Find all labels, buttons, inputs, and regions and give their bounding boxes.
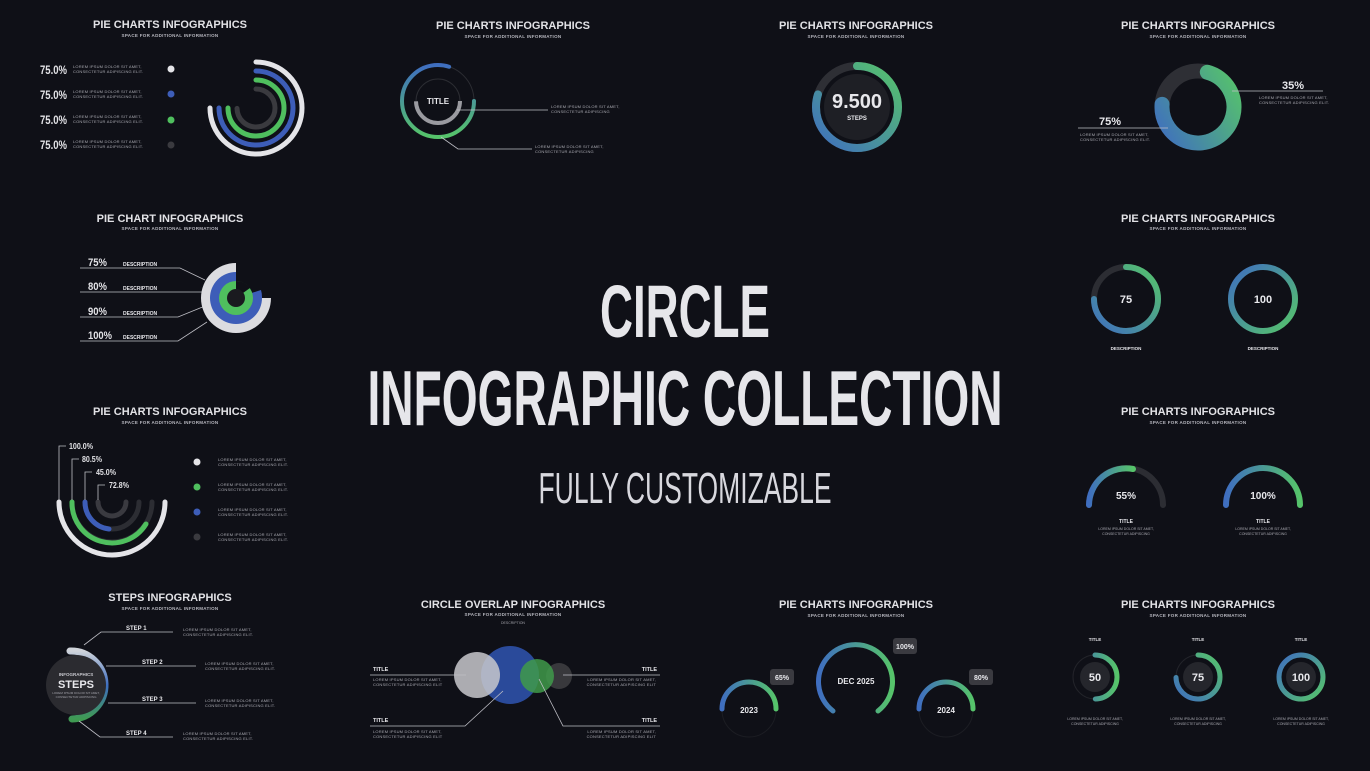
gauge 100%: LOREM IPSUM DOLOR SIT AMET,: [1235, 527, 1291, 531]
gauge 100%: [1226, 468, 1300, 536]
rows: DESCRIPTION: [123, 311, 158, 317]
callouts: CONSECTETUR ADIPISCING ELIT.: [1259, 100, 1329, 105]
heading: [93, 19, 247, 38]
callouts: TITLE: [373, 718, 389, 724]
heading: PIE CHARTS INFOGRAPHICS: [93, 406, 247, 418]
callouts: CONSECTETUR ADIPISCING: [551, 109, 610, 114]
legend rows: [40, 63, 174, 152]
callouts: LOREM IPSUM DOLOR SIT AMET,: [1259, 95, 1328, 100]
step labels: LOREM IPSUM DOLOR SIT AMET,: [183, 731, 252, 736]
value labels: 100.0%: [69, 442, 93, 451]
chart: steps ring: 9.500: [832, 91, 882, 113]
callouts: LOREM IPSUM DOLOR SIT AMET,: [587, 677, 656, 682]
subtitle: FULLY CUSTOMIZABLE: [538, 464, 832, 513]
ring 100: LOREM IPSUM DOLOR SIT AMET,: [1273, 717, 1329, 721]
gauge 55%: 55%: [1116, 491, 1136, 502]
ring 75: CONSECTETUR ADIPISCING: [1174, 722, 1222, 726]
heading: PIE CHART INFOGRAPHICS: [97, 213, 243, 225]
ring 75: TITLE: [1192, 637, 1204, 642]
callouts: TITLE: [373, 667, 389, 673]
chart: steps circle: STEPS: [58, 679, 94, 691]
legend rows: 75.0%: [40, 138, 67, 152]
legend rows: LOREM IPSUM DOLOR SIT AMET,: [73, 89, 142, 94]
ring 100: TITLE: [1295, 637, 1307, 642]
heading: PIE CHARTS INFOGRAPHICS: [1121, 20, 1275, 32]
badge 100%: [893, 638, 917, 654]
legend rows: CONSECTETUR ADIPISCING ELIT.: [73, 119, 143, 124]
legend rows: 75.0%: [40, 63, 67, 77]
heading: PIE CHARTS INFOGRAPHICS: [436, 20, 590, 32]
gauge 55%: TITLE: [1119, 519, 1134, 525]
chart: donut: [1154, 63, 1242, 151]
rows: 100%: [88, 330, 112, 342]
badge 65%: [770, 669, 794, 685]
step labels: LOREM IPSUM DOLOR SIT AMET,: [205, 661, 274, 666]
heading: [1121, 406, 1275, 425]
callouts: LOREM IPSUM DOLOR SIT AMET,: [373, 677, 442, 682]
ring 75: 75: [1120, 294, 1132, 306]
gauge 55%: CONSECTETUR ADIPISCING: [1102, 532, 1150, 536]
legend: LOREM IPSUM DOLOR SIT AMET,: [218, 532, 287, 537]
gauge 55%: LOREM IPSUM DOLOR SIT AMET,: [1098, 527, 1154, 531]
chart: steps ring: [816, 66, 898, 148]
step labels: LOREM IPSUM DOLOR SIT AMET,: [205, 698, 274, 703]
panel: title ring: [402, 20, 620, 154]
heading: SPACE FOR ADDITIONAL INFORMATION: [1150, 34, 1246, 39]
callouts: [441, 104, 620, 154]
panel: steps infographics: [46, 592, 275, 741]
callouts: 35%: [1282, 80, 1304, 92]
heading: [421, 599, 605, 625]
value labels: 72.8%: [109, 481, 129, 490]
gauge 2023: [722, 682, 776, 737]
chart: layered pie: [201, 263, 271, 333]
step labels: CONSECTETUR ADIPISCING ELIT.: [205, 666, 275, 671]
legend: LOREM IPSUM DOLOR SIT AMET,: [218, 457, 287, 462]
chart: ring: TITLE: [427, 97, 450, 106]
step labels: CONSECTETUR ADIPISCING ELIT.: [205, 703, 275, 708]
gauge 2024: [919, 682, 973, 737]
heading: SPACE FOR ADDITIONAL INFORMATION: [122, 420, 218, 425]
heading: SPACE FOR ADDITIONAL INFORMATION: [1150, 226, 1246, 231]
heading: PIE CHARTS INFOGRAPHICS: [1121, 599, 1275, 611]
legend rows: CONSECTETUR ADIPISCING ELIT.: [73, 144, 143, 149]
heading: [93, 406, 247, 425]
heading: PIE CHARTS INFOGRAPHICS: [779, 20, 933, 32]
heading: [779, 599, 933, 618]
heading: [436, 20, 590, 39]
badge 80%: [969, 669, 993, 685]
heading: CIRCLE OVERLAP INFOGRAPHICS: [421, 599, 605, 611]
chart: steps ring: STEPS: [847, 116, 867, 122]
badge 65%: 65%: [775, 675, 790, 682]
callouts: [1078, 80, 1329, 142]
panel: circle overlap: [370, 599, 660, 739]
legend: CONSECTETUR ADIPISCING ELIT.: [218, 462, 288, 467]
heading: PIE CHARTS INFOGRAPHICS: [779, 599, 933, 611]
panel: two rings 75/100: [1094, 213, 1295, 351]
ring 50: 50: [1089, 672, 1101, 684]
callouts: CONSECTETUR ADIPISCING ELIT: [373, 682, 443, 687]
step labels: STEP 1: [126, 626, 147, 632]
gauge 2024: 2024: [937, 706, 955, 715]
rows: DESCRIPTION: [123, 262, 158, 268]
heading: SPACE FOR ADDITIONAL INFORMATION: [808, 613, 904, 618]
legend rows: CONSECTETUR ADIPISCING ELIT.: [73, 94, 143, 99]
rows: DESCRIPTION: [123, 286, 158, 292]
panel: three rings 50/75/100: [1067, 599, 1329, 726]
gauge 100%: TITLE: [1256, 519, 1271, 525]
callouts: CONSECTETUR ADIPISCING ELIT.: [1080, 137, 1150, 142]
heading: [97, 213, 243, 231]
gauge dec 2025: [818, 645, 892, 711]
panel: half-circle arcs with legend: [59, 406, 288, 555]
ring 75: [1094, 267, 1158, 351]
step labels: STEP 2: [142, 660, 163, 666]
ring 50: TITLE: [1089, 637, 1101, 642]
heading: STEPS INFOGRAPHICS: [108, 592, 232, 604]
step labels: LOREM IPSUM DOLOR SIT AMET,: [183, 627, 252, 632]
callouts: LOREM IPSUM DOLOR SIT AMET,: [1080, 132, 1149, 137]
panel: donut 35/75: [1078, 20, 1329, 151]
gauge 100%: 100%: [1250, 491, 1276, 502]
heading: SPACE FOR ADDITIONAL INFORMATION: [465, 34, 561, 39]
callouts: CONSECTETUR ADIPISCING ELIT: [373, 734, 443, 739]
chart: ring: [402, 65, 474, 137]
rows: 90%: [88, 306, 107, 318]
heading: [1121, 20, 1275, 39]
ring 100: 100: [1292, 672, 1310, 684]
legend rows: LOREM IPSUM DOLOR SIT AMET,: [73, 114, 142, 119]
chart: steps circle: INFOGRAPHICS: [59, 672, 93, 677]
heading: [108, 592, 232, 611]
heading: PIE CHARTS INFOGRAPHICS: [93, 19, 247, 31]
legend rows: LOREM IPSUM DOLOR SIT AMET,: [73, 139, 142, 144]
heading: PIE CHARTS INFOGRAPHICS: [1121, 406, 1275, 418]
callouts: LOREM IPSUM DOLOR SIT AMET,: [535, 144, 604, 149]
panel: pie chart descriptions: [80, 213, 271, 342]
main title: CIRCLE: [600, 270, 770, 353]
callouts: TITLE: [642, 667, 657, 673]
chart: semicircle arcs: [59, 502, 165, 555]
step labels: STEP 3: [142, 697, 163, 703]
ring 100: 100: [1254, 294, 1272, 306]
rows: 75%: [88, 257, 107, 269]
chart: steps circle: CONSECTETUR ADIPISCING: [56, 695, 97, 699]
legend: LOREM IPSUM DOLOR SIT AMET,: [218, 507, 287, 512]
main title: [368, 270, 1002, 513]
legend rows: 75.0%: [40, 88, 67, 102]
step labels: CONSECTETUR ADIPISCING ELIT.: [183, 632, 253, 637]
chart: overlapping circles: [454, 646, 572, 704]
ring 100: CONSECTETUR ADIPISCING: [1277, 722, 1325, 726]
badge 80%: 80%: [974, 675, 989, 682]
ring 75: [1170, 637, 1226, 726]
legend: [194, 457, 288, 542]
rows: DESCRIPTION: [123, 335, 158, 341]
ring 50: CONSECTETUR ADIPISCING: [1071, 722, 1119, 726]
panel: 9.500 steps ring: [779, 20, 933, 148]
rows: [80, 257, 210, 342]
ring 50: LOREM IPSUM DOLOR SIT AMET,: [1067, 717, 1123, 721]
ring 75: DESCRIPTION: [1111, 346, 1141, 351]
rows: 80%: [88, 281, 107, 293]
callouts: [370, 667, 660, 739]
callouts: LOREM IPSUM DOLOR SIT AMET,: [551, 104, 620, 109]
callouts: CONSECTETUR ADIPISCING ELIT: [587, 734, 656, 739]
callouts: 75%: [1099, 116, 1121, 128]
chart: concentric arcs: [210, 62, 302, 154]
legend rows: 75.0%: [40, 113, 67, 127]
ring 100: DESCRIPTION: [1248, 346, 1278, 351]
badge 100%: 100%: [896, 644, 915, 651]
heading: SPACE FOR ADDITIONAL INFORMATION: [1150, 613, 1246, 618]
legend: CONSECTETUR ADIPISCING ELIT.: [218, 512, 288, 517]
gauge 2023: 2023: [740, 706, 758, 715]
value labels: [59, 442, 129, 500]
gauge dec 2025: DEC 2025: [838, 677, 875, 686]
heading: [779, 20, 933, 39]
panel: top-left concentric arcs: [40, 19, 302, 154]
legend: LOREM IPSUM DOLOR SIT AMET,: [218, 482, 287, 487]
value labels: 80.5%: [82, 455, 102, 464]
gauge 100%: CONSECTETUR ADIPISCING: [1239, 532, 1287, 536]
ring 100: [1273, 637, 1329, 726]
callouts: LOREM IPSUM DOLOR SIT AMET,: [587, 729, 656, 734]
panel: year gauges: [722, 599, 993, 737]
callouts: CONSECTETUR ADIPISCING ELIT: [587, 682, 656, 687]
ring 100: [1231, 267, 1295, 351]
heading: [1121, 213, 1275, 231]
callouts: TITLE: [642, 718, 657, 724]
heading: SPACE FOR ADDITIONAL INFORMATION: [122, 33, 218, 38]
ring 75: LOREM IPSUM DOLOR SIT AMET,: [1170, 717, 1226, 721]
heading: SPACE FOR ADDITIONAL INFORMATION: [1150, 420, 1246, 425]
heading: DESCRIPTION: [501, 621, 525, 625]
ring 75: 75: [1192, 672, 1204, 684]
heading: PIE CHARTS INFOGRAPHICS: [1121, 213, 1275, 225]
gauge 55%: [1089, 468, 1163, 536]
step labels: [79, 626, 275, 741]
heading: SPACE FOR ADDITIONAL INFORMATION: [808, 34, 904, 39]
legend rows: CONSECTETUR ADIPISCING ELIT.: [73, 69, 143, 74]
ring 50: [1067, 637, 1123, 726]
panel: semicircle gauges: [1089, 406, 1300, 536]
heading: SPACE FOR ADDITIONAL INFORMATION: [465, 612, 561, 617]
legend rows: LOREM IPSUM DOLOR SIT AMET,: [73, 64, 142, 69]
step labels: CONSECTETUR ADIPISCING ELIT.: [183, 736, 253, 741]
callouts: LOREM IPSUM DOLOR SIT AMET,: [373, 729, 442, 734]
callouts: CONSECTETUR ADIPISCING: [535, 149, 594, 154]
chart: steps circle: [46, 651, 106, 719]
heading: SPACE FOR ADDITIONAL INFORMATION: [122, 606, 218, 611]
heading: [1121, 599, 1275, 618]
value labels: 45.0%: [96, 468, 116, 477]
legend: CONSECTETUR ADIPISCING ELIT.: [218, 487, 288, 492]
chart: steps circle: LOREM IPSUM DOLOR SIT AMET,: [52, 691, 100, 695]
heading: SPACE FOR ADDITIONAL INFORMATION: [122, 226, 218, 231]
step labels: STEP 4: [126, 731, 147, 737]
legend: CONSECTETUR ADIPISCING ELIT.: [218, 537, 288, 542]
